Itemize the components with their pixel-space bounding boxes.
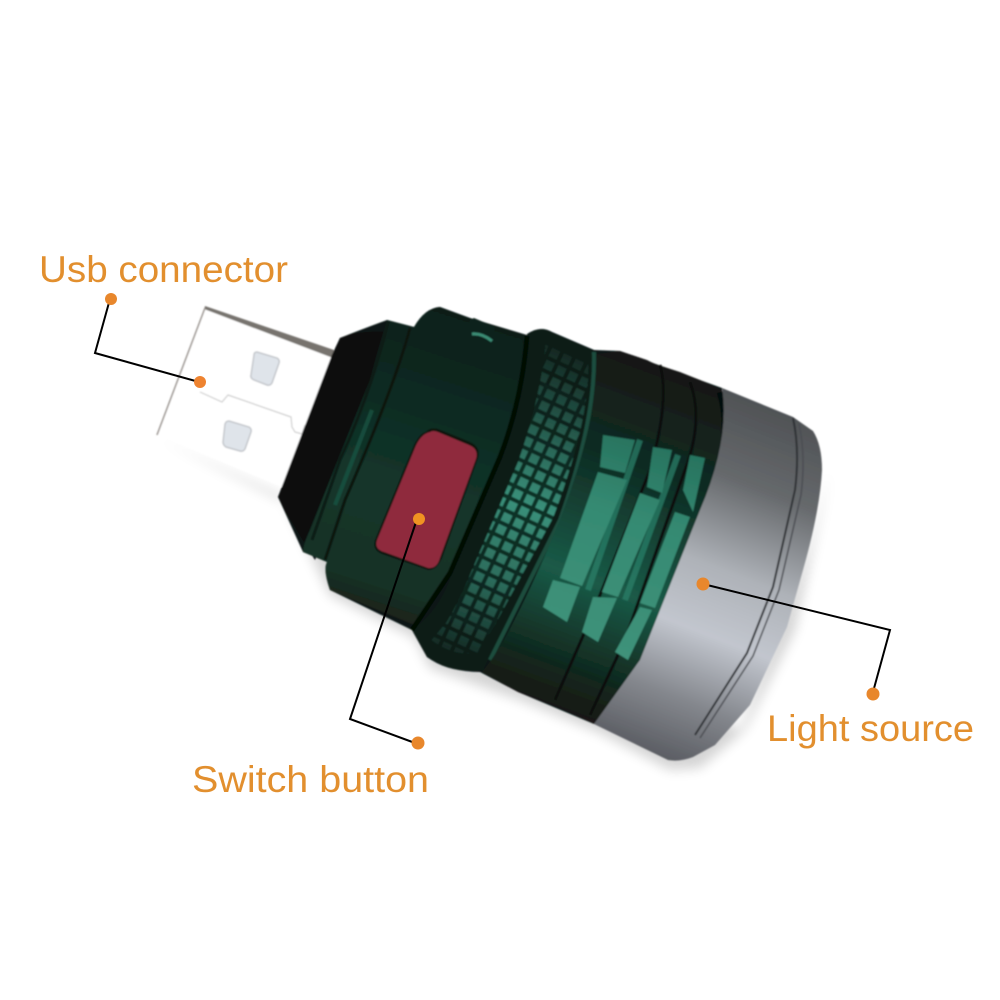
- USB contact window bottom: [223, 421, 251, 451]
- leader line switch button: [350, 522, 416, 743]
- dark silhouette: [278, 307, 722, 724]
- dot USB connector top: [105, 293, 117, 305]
- light ridges: [588, 440, 678, 600]
- callout: USB connector: [39, 249, 288, 388]
- dot light source lower: [866, 688, 880, 700]
- leader line light source: [703, 584, 890, 692]
- silver bezel: [594, 388, 822, 761]
- dot light source target: [696, 578, 710, 590]
- leader line USB connector: [95, 299, 199, 382]
- callout: light source: [696, 578, 974, 749]
- label USB connector: Usb connector: [39, 249, 288, 290]
- teal grip blocks: [543, 435, 705, 660]
- label switch button: Switch button: [192, 759, 429, 800]
- illustration: USB flashlight: [157, 306, 822, 761]
- switch button: [374, 428, 479, 570]
- USB contact window top: [251, 352, 279, 385]
- grooved head section: [482, 351, 725, 724]
- dot USB connector target: [194, 376, 206, 388]
- dot switch button target: [413, 513, 425, 525]
- USB plug: [157, 306, 334, 487]
- green body section: [303, 307, 527, 625]
- small clip tab: [470, 318, 495, 341]
- dot switch button lower: [412, 736, 424, 750]
- black collar: [278, 332, 390, 560]
- callout: switch button: [192, 513, 429, 800]
- flashlight shadow: [157, 438, 830, 770]
- knurled ring: [412, 329, 594, 671]
- label light source: Light source: [767, 708, 974, 749]
